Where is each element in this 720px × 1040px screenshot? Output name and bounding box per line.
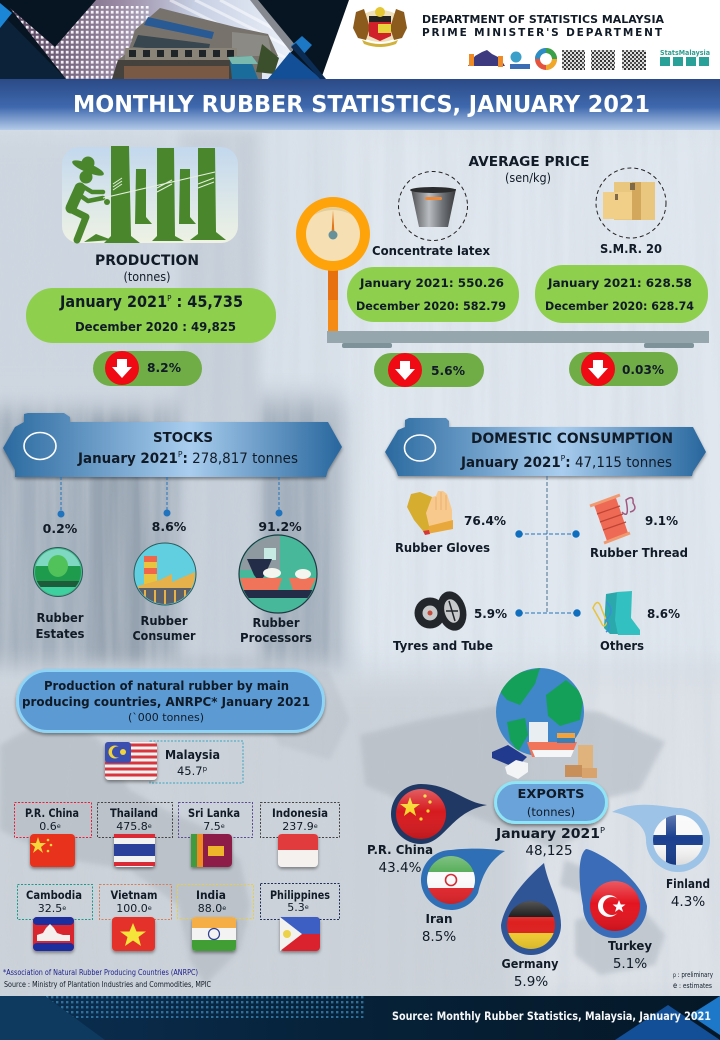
Malaysia: Malaysia <box>165 748 220 762</box>
panel: exports <box>367 668 713 990</box>
StatsMalaysia social block: StatsMalaysia <box>660 49 710 57</box>
Germany label: Germany <box>502 957 559 971</box>
panel: stocks <box>3 413 342 645</box>
icon: latex bucket <box>398 172 468 240</box>
StatsMalaysia social block <box>660 49 710 66</box>
consumption total: P <box>561 454 565 463</box>
Germany share: 5.9% <box>514 974 548 990</box>
Sri Lanka box: e <box>221 822 225 830</box>
stocks total: January 2021 <box>77 451 178 467</box>
panel: production <box>26 146 276 386</box>
latex change: 5.6% <box>431 363 465 378</box>
source note: Source : Ministry of Plantation Industries and Commodities, MPIC <box>4 980 211 989</box>
panel: ANRPC production <box>3 670 340 989</box>
latex label: Concentrate latex <box>372 244 490 258</box>
building <box>112 8 279 79</box>
processors label: Rubber <box>252 616 300 630</box>
stocks heading: STOCKS <box>153 430 213 446</box>
title: MONTHLY RUBBER STATISTICS, JANUARY 2021 <box>73 90 650 118</box>
production values pill: December 2020 : 49,825 <box>75 320 236 334</box>
flag: India <box>192 917 236 951</box>
Indonesia box <box>260 802 340 838</box>
icon: rubber tapper and trees <box>62 146 238 243</box>
concentrate latex values pill: December 2020: 582.79 <box>356 299 506 313</box>
panel: domestic consumption <box>385 418 706 653</box>
ANRPC heading pill <box>18 670 324 732</box>
panel: average price <box>296 154 709 387</box>
Thailand box <box>98 802 172 838</box>
concentrate latex values pill <box>347 267 519 322</box>
Vietnam box <box>100 884 172 920</box>
header photo strip <box>0 0 349 79</box>
consumption total: January 2021 <box>460 455 561 471</box>
Finland share: 4.3% <box>671 894 705 910</box>
Philippines box: 5.3 <box>287 901 305 914</box>
QR code <box>591 50 615 70</box>
gloves share: 76.4% <box>464 513 506 528</box>
Sri Lanka box: 7.5 <box>203 820 221 833</box>
consumption total: : <box>565 455 571 471</box>
others share: 8.6% <box>647 606 680 621</box>
footer band <box>0 996 720 1040</box>
tyres share: 5.9% <box>474 606 507 621</box>
production values pill: : 45,735 <box>171 292 243 311</box>
stocks total: : <box>183 451 188 467</box>
thread share: 9.1% <box>645 513 678 528</box>
icon: weighing scale <box>296 197 709 348</box>
stocks banner <box>3 413 342 477</box>
SMR values pill <box>535 265 708 323</box>
icon: tyres <box>414 588 471 634</box>
production change <box>93 351 202 386</box>
Thailand box: 475.8 <box>116 820 148 833</box>
processors label <box>240 616 312 645</box>
Thailand box: Thailand <box>110 806 158 820</box>
drop: Turkey <box>580 849 647 938</box>
drop: Germany <box>501 863 561 955</box>
drop: Iran <box>421 849 505 910</box>
flag: Vietnam <box>112 917 155 951</box>
flag: China <box>30 834 75 867</box>
consumption heading: DOMESTIC CONSUMPTION <box>471 431 673 447</box>
Indonesia box: Indonesia <box>272 806 328 820</box>
P.R. China box: 0.6 <box>39 820 57 833</box>
coat of arms logo <box>353 7 407 47</box>
unit: (sen/kg) <box>505 171 551 185</box>
world map backdrop <box>0 665 665 985</box>
others label: Others <box>600 639 644 653</box>
icon: estates <box>34 548 82 596</box>
exports heading: EXPORTS <box>518 786 584 801</box>
SMR values pill: December 2020: 628.74 <box>545 299 694 313</box>
consumer label: Consumer <box>132 629 196 643</box>
department name: DEPARTMENT OF STATISTICS MALAYSIA <box>422 14 665 26</box>
exports period: P <box>600 826 605 835</box>
Vietnam box: e <box>148 904 152 912</box>
consumption total: 47,115 tonnes <box>575 455 676 471</box>
flag: Sri Lanka <box>191 834 232 867</box>
exports period: January 2021 <box>496 826 596 842</box>
production values pill <box>26 288 276 343</box>
Indonesia box: 237.9 <box>282 820 314 833</box>
P.R. China box: e <box>57 822 61 830</box>
tyres label: Tyres and Tube <box>393 639 493 653</box>
Thailand box: e <box>148 822 152 830</box>
Philippines box <box>260 884 340 920</box>
Turkey share: 5.1% <box>613 956 647 972</box>
ANRPC heading pill: producing countries, ANRPC* January 2021 <box>22 695 310 709</box>
icon: thread spool <box>590 495 635 543</box>
ministry name: PRIME MINISTER'S DEPARTMENT <box>422 27 663 39</box>
gloves label: Rubber Gloves <box>395 541 490 555</box>
latex change <box>374 353 484 387</box>
Vietnam box: Vietnam <box>110 888 158 902</box>
concentrate latex values pill: January 2021: 550.26 <box>359 276 504 290</box>
SMR label: S.M.R. 20 <box>600 242 662 256</box>
icon: consumer factory <box>134 543 196 606</box>
flag: Cambodia <box>33 917 74 951</box>
production heading: PRODUCTION <box>95 253 199 269</box>
legend: preliminary and estimates: e : estimates <box>673 981 712 990</box>
P.R. China share: 43.4% <box>379 860 422 876</box>
Philippines box: Philippines <box>270 888 330 902</box>
ANRPC heading pill: Production of natural rubber by main <box>44 679 289 693</box>
connector dots <box>515 530 581 617</box>
P.R. China label: P.R. China <box>367 843 433 857</box>
India box: 88.0 <box>198 902 222 915</box>
stocks total: 278,817 tonnes <box>192 451 302 467</box>
stocks total: P <box>178 450 183 459</box>
Indonesia box: e <box>314 822 318 830</box>
P.R. China box <box>14 802 92 838</box>
thread label: Rubber Thread <box>590 546 688 560</box>
P.R. China box: P.R. China <box>25 806 79 820</box>
Vietnam box: 100.0 <box>116 902 148 915</box>
exports heading pill <box>496 782 606 822</box>
estates label: Rubber <box>36 611 84 625</box>
production values pill: January 2021 <box>60 292 179 311</box>
legend: preliminary and estimates <box>673 971 713 990</box>
SDG wheel <box>538 50 554 68</box>
Cambodia box: e <box>62 904 66 912</box>
icon: boots <box>593 591 640 635</box>
Malaysia: 45.7 <box>177 764 203 778</box>
Cambodia box: Cambodia <box>26 888 82 902</box>
QR code <box>562 50 585 70</box>
Sri Lanka box <box>178 802 252 838</box>
title band <box>0 79 720 130</box>
Malaysia <box>105 741 243 783</box>
Finland label: Finland <box>666 877 710 891</box>
flag: Philippines <box>280 917 320 951</box>
flag: Malaysia <box>105 742 157 780</box>
SMR change: 0.03% <box>622 362 664 377</box>
processors label: Processors <box>240 631 312 645</box>
Philippines box: e <box>305 903 309 911</box>
India box: India <box>196 888 226 902</box>
consumer label <box>132 614 196 643</box>
icon: processors <box>239 535 317 613</box>
India box <box>178 884 254 918</box>
estates label: Estates <box>36 627 84 641</box>
ANRPC heading pill: (`000 tonnes) <box>128 711 204 724</box>
QR code <box>622 50 646 70</box>
unit: (tonnes) <box>124 270 170 284</box>
Iran share: 8.5% <box>422 929 456 945</box>
estates share: 0.2% <box>43 521 78 536</box>
Malaysia: p <box>203 765 208 773</box>
stocks connectors <box>58 477 282 518</box>
drop: Finland <box>612 805 710 872</box>
Turkey label: Turkey <box>608 939 652 953</box>
India box: e <box>222 904 226 912</box>
header banner <box>0 0 720 79</box>
Iran label: Iran <box>426 912 452 926</box>
exports total: 48,125 <box>525 843 573 859</box>
production values pill: P <box>167 294 172 303</box>
mascot logo <box>468 50 505 67</box>
processors share: 91.2% <box>258 519 302 534</box>
consumer share: 8.6% <box>152 519 187 534</box>
flag: Indonesia <box>278 834 318 867</box>
icon: rubber bales <box>596 168 666 238</box>
Sri Lanka box: Sri Lanka <box>188 806 240 820</box>
price heading: AVERAGE PRICE <box>468 154 590 170</box>
SMR values pill: January 2021: 628.58 <box>547 276 692 290</box>
production change: 8.2% <box>147 360 181 375</box>
consumption connectors <box>519 476 577 613</box>
estates label <box>36 611 84 641</box>
SMR change <box>569 352 678 386</box>
icon: gloves <box>407 491 453 535</box>
Cambodia box <box>18 884 92 920</box>
flag: Thailand <box>114 834 155 867</box>
census logo <box>510 52 530 69</box>
ANRPC footnote: *Association of Natural Rubber Producing Countries (ANRPC) <box>3 968 198 977</box>
drop: P.R. China <box>391 784 487 844</box>
consumption banner <box>385 418 706 476</box>
consumer label: Rubber <box>140 614 188 628</box>
Cambodia box: 32.5 <box>38 902 62 915</box>
icon: globe with ship, truck and boxes <box>492 668 597 779</box>
exports unit: (tonnes) <box>527 805 575 819</box>
